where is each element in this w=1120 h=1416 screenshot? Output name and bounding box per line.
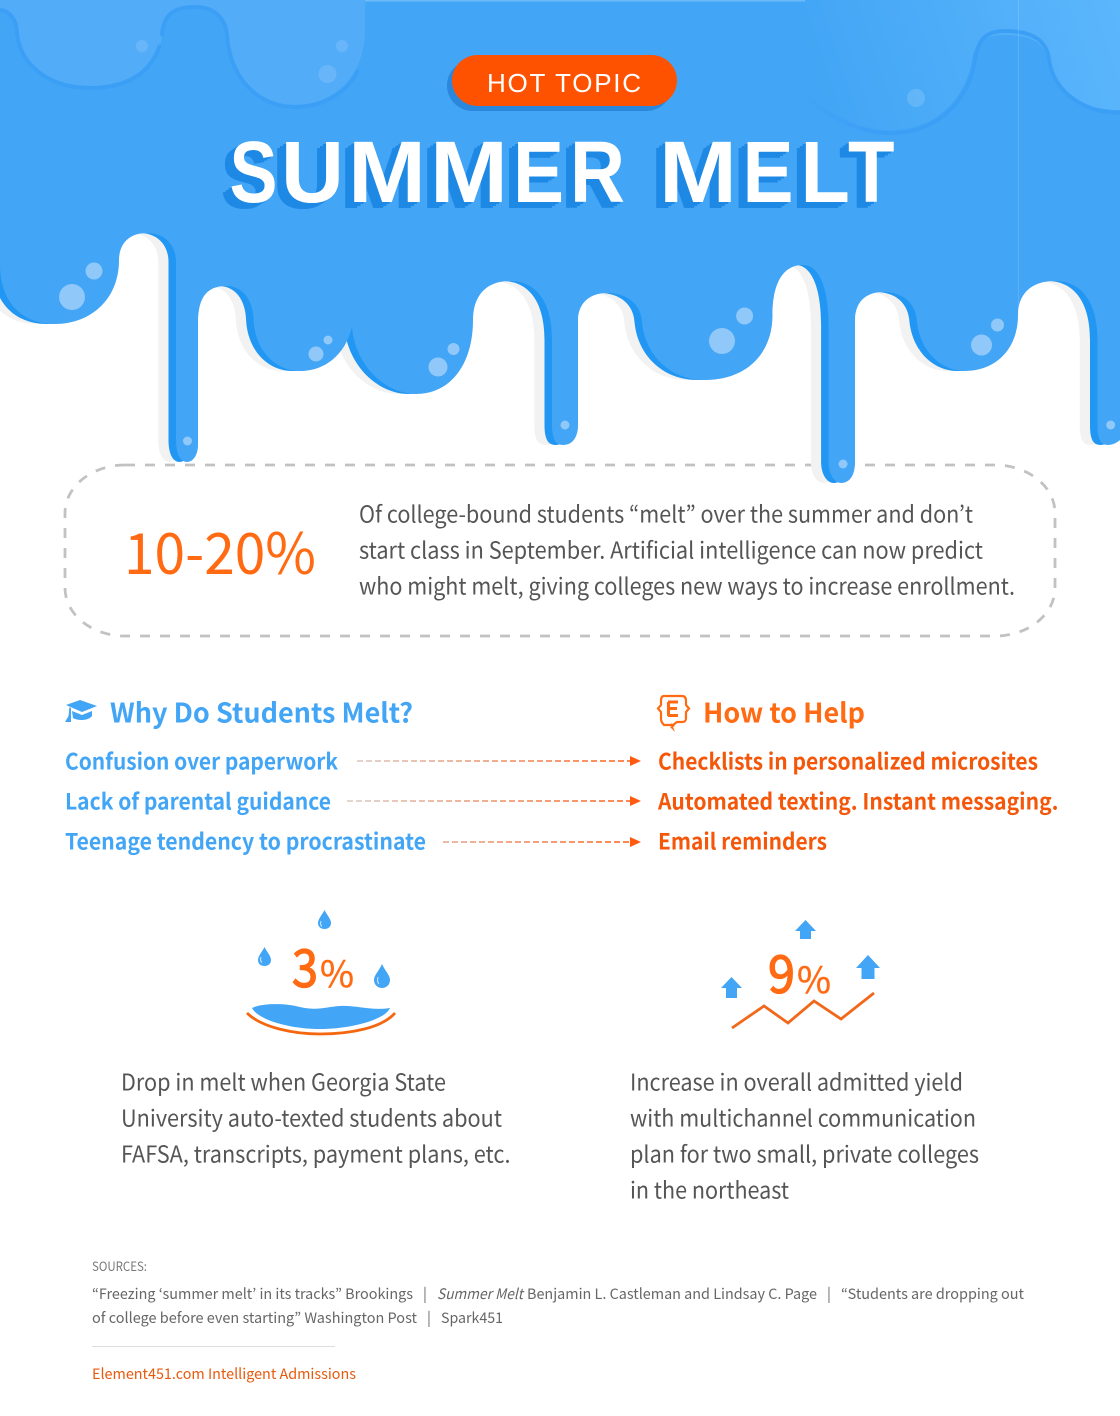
sources: | xyxy=(423,1283,427,1304)
title: E xyxy=(513,124,564,221)
list: causes: Lack of parental guidance xyxy=(65,784,331,816)
title: M xyxy=(430,124,508,221)
melting header background xyxy=(0,0,1120,483)
sources: | xyxy=(827,1283,831,1304)
top-right pale lobes xyxy=(805,0,1120,130)
list: remedies xyxy=(657,744,1058,856)
title: E xyxy=(742,124,794,221)
list: causes: Confusion over paperwork xyxy=(65,744,338,776)
title: L xyxy=(800,124,850,221)
bubbles xyxy=(59,262,1115,468)
icon: element451 logo xyxy=(658,696,689,732)
sources: “Students are dropping out xyxy=(841,1283,1025,1304)
title: U xyxy=(281,124,344,221)
sources: of college before even starting” Washington Post xyxy=(92,1307,418,1328)
sources xyxy=(92,1256,1025,1328)
list: causes: Teenage tendency to procrastinate xyxy=(65,824,426,856)
text: admitted yield stat: plan for two small, private colleges xyxy=(630,1136,979,1170)
sources: Spark451 xyxy=(441,1307,503,1328)
badge: hot topic: HOT TOPIC xyxy=(487,68,641,98)
sources: Summer Melt xyxy=(437,1283,524,1304)
text: georgia state stat: Drop in melt when Georgia State xyxy=(121,1064,446,1098)
icon: 9 percent chart with arrows: % xyxy=(797,952,831,1004)
text: georgia state stat: FAFSA, transcripts, payment plans, etc. xyxy=(121,1136,510,1170)
text: admitted yield stat xyxy=(630,1064,979,1206)
icon: graduation cap xyxy=(65,700,97,722)
dashed callout frame xyxy=(65,465,1055,636)
intro paragraph: who might melt, giving colleges new ways to increase enrollment. xyxy=(359,568,1015,602)
text: georgia state stat xyxy=(121,1064,510,1170)
icon: 9 percent chart with arrows: 9 xyxy=(768,933,795,1008)
list: remedies: Checklists in personalized microsites xyxy=(658,744,1038,776)
arrows: causes to remedies xyxy=(347,761,631,842)
icon: 3 percent puddle with drops: % xyxy=(320,946,354,998)
top-left pale lobes xyxy=(0,0,365,105)
intro paragraph: start class in September. Artificial intelligence can now predict xyxy=(359,532,983,566)
badge: hot topic xyxy=(447,55,677,111)
intro paragraph xyxy=(359,496,1015,602)
sources: | xyxy=(427,1307,431,1328)
heading: how to help: How to Help xyxy=(703,692,865,730)
icon: 3 percent puddle with drops: 3 xyxy=(292,927,318,1002)
title: T xyxy=(848,124,894,221)
title: M xyxy=(348,124,426,221)
title: S xyxy=(230,124,278,221)
sources: “Freezing ‘summer melt’ in its tracks” Brookings xyxy=(92,1283,413,1304)
text: admitted yield stat: in the northeast xyxy=(630,1172,789,1206)
title: R xyxy=(570,124,625,221)
text: admitted yield stat: Increase in overall admitted yield xyxy=(630,1064,963,1098)
title: M xyxy=(659,124,737,221)
sources: Benjamin L. Castleman and Lindsay C. Page xyxy=(527,1283,817,1304)
sources: SOURCES: xyxy=(92,1256,147,1275)
heading: why do students melt: Why Do Students Melt? xyxy=(110,692,413,730)
list: remedies: Automated texting. Instant messaging. xyxy=(657,784,1058,816)
icon: 3 percent puddle with drops xyxy=(247,910,395,1034)
icon: 9 percent chart with arrows xyxy=(721,920,880,1028)
list: causes xyxy=(65,744,426,856)
title xyxy=(230,124,894,221)
statistic: 10-20%: 10-20% xyxy=(124,509,316,591)
text: georgia state stat: University auto-texted students about xyxy=(121,1100,502,1134)
text: admitted yield stat: with multichannel communication xyxy=(630,1100,976,1134)
intro paragraph: Of college-bound students “melt” over the summer and don’t xyxy=(359,496,973,530)
footer link: Element451.com Intelligent Admissions xyxy=(92,1363,356,1384)
list: remedies: Email reminders xyxy=(658,824,827,856)
